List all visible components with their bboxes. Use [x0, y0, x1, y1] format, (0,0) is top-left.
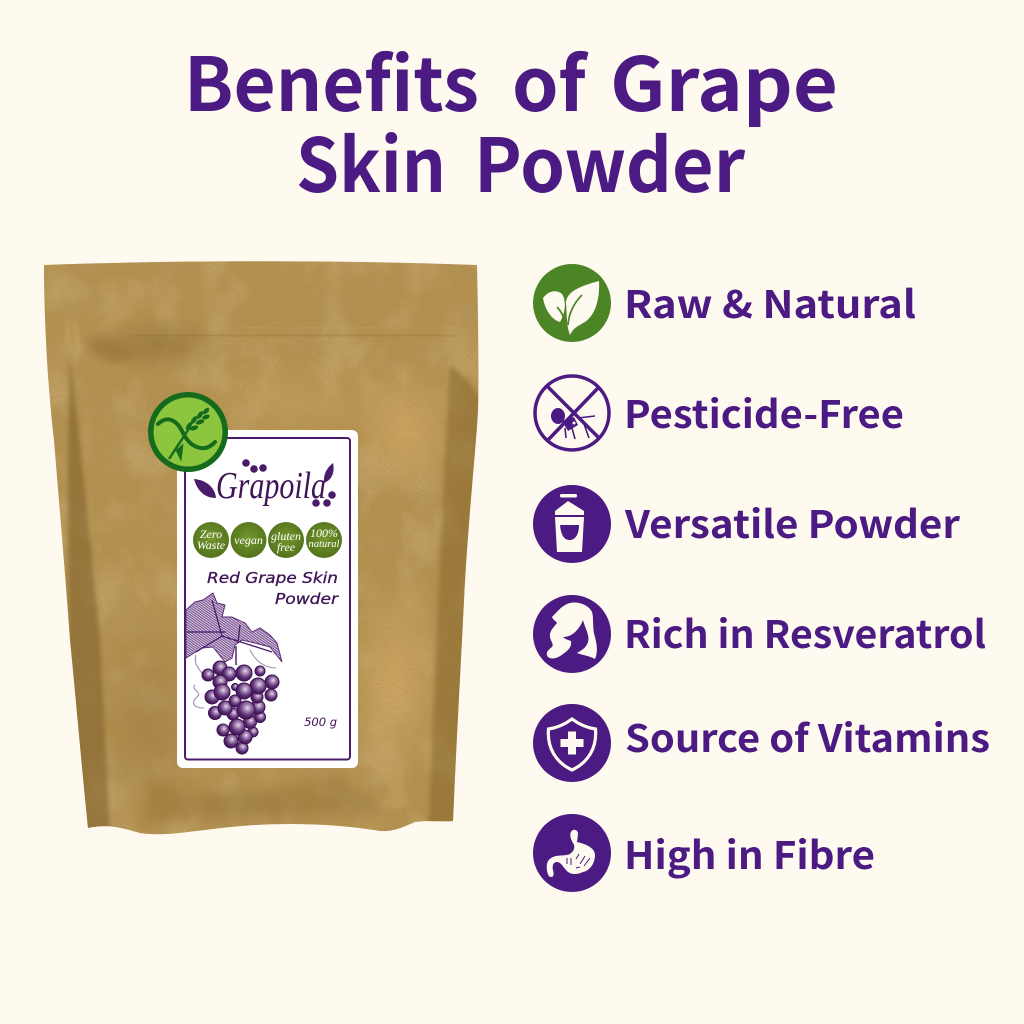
certification badges: free — [277, 540, 296, 554]
seal crease — [66, 318, 460, 361]
icon: shield with cross — [533, 704, 611, 782]
title: Grape — [610, 26, 838, 133]
benefit: High in Fibre — [533, 814, 875, 892]
icon: powder shaker cup — [533, 485, 611, 563]
title: Skin — [296, 107, 446, 214]
label: Versatile Powder — [624, 494, 960, 549]
label: Rich in Resveratrol — [624, 604, 986, 659]
benefit: Pesticide-Free — [535, 376, 904, 450]
certification badges: vegan — [234, 533, 263, 547]
icon: leaf sprout — [533, 264, 611, 342]
label: Raw & Natural — [624, 274, 916, 329]
title: Benefits — [184, 26, 479, 133]
gluten-free badge — [148, 392, 228, 472]
certification badges — [193, 522, 342, 558]
certification badges: gluten — [271, 529, 301, 543]
label: Source of Vitamins — [625, 708, 990, 763]
title — [184, 26, 838, 214]
benefit: Raw & Natural — [533, 264, 916, 342]
certification badges: Zero — [200, 527, 222, 541]
pack weight: 500 g — [304, 715, 337, 729]
left gusset — [68, 358, 110, 835]
certification badges: 100% — [310, 526, 338, 540]
grape illustration — [186, 593, 282, 754]
certification badges: Waste — [197, 538, 226, 552]
bottom folds — [388, 773, 408, 808]
product: kraft pouch — [40, 258, 482, 838]
product name: Powder — [275, 590, 340, 608]
icon: stomach — [533, 814, 611, 892]
benefit: Versatile Powder — [533, 485, 960, 563]
icon: woman silhouette — [533, 595, 611, 673]
title: Powder — [474, 107, 746, 214]
brand logo — [194, 459, 336, 507]
product label — [177, 430, 358, 768]
benefit: Source of Vitamins — [533, 704, 990, 782]
product name — [207, 569, 340, 608]
title: of — [512, 26, 588, 133]
product name: Red Grape Skin — [207, 569, 338, 587]
benefit: Rich in Resveratrol — [533, 595, 986, 673]
brand logo: Grapoila — [216, 465, 326, 507]
right gusset — [428, 366, 480, 835]
icon: crossed-out insect — [535, 376, 609, 450]
label: High in Fibre — [624, 825, 875, 880]
label: Pesticide-Free — [624, 384, 904, 439]
certification badges: natural — [309, 539, 340, 550]
